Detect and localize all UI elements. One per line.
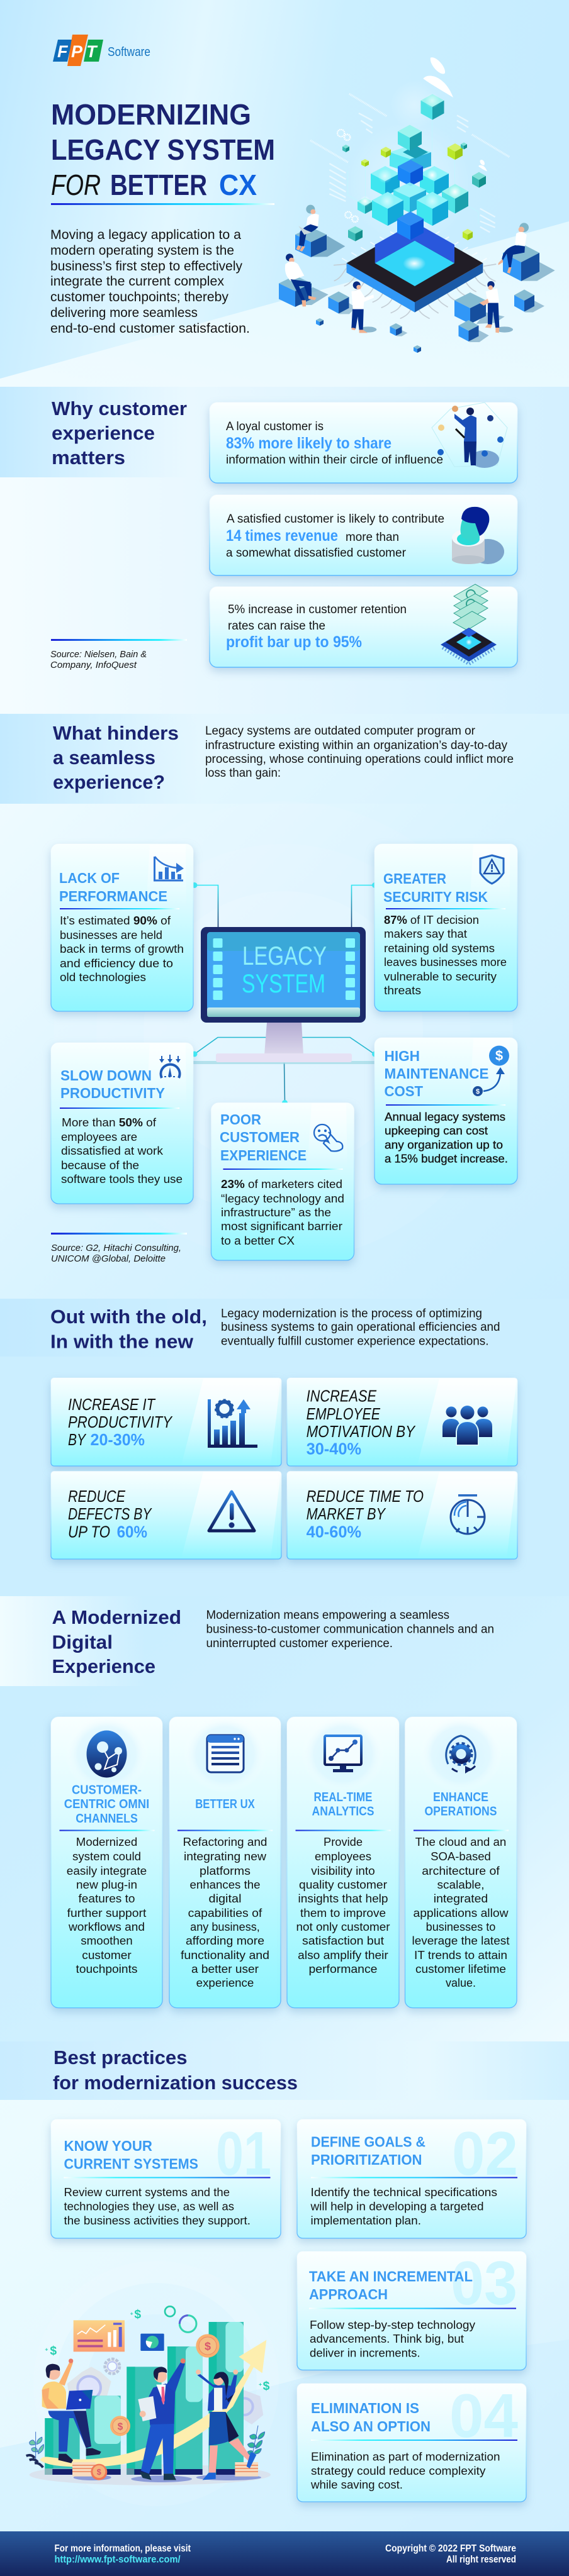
source note xyxy=(50,639,187,670)
heading xyxy=(53,2046,298,2094)
card: enhance operations: integrated xyxy=(434,1892,488,1905)
illustration: team celebrating growth: $ xyxy=(263,2380,270,2393)
card: poor customer experience: to a better CX xyxy=(221,1235,295,1247)
icon: rising bars with gear xyxy=(208,1399,257,1448)
card: real-time analytics: also amplify their xyxy=(298,1949,388,1962)
card: enhance operations xyxy=(405,1715,517,2008)
stat card: reduce defects: 60% xyxy=(117,1523,147,1541)
card: lack of performance: businesses are held xyxy=(60,929,162,941)
title: MODERNIZING xyxy=(51,98,251,131)
card: poor customer experience: 23% of marketers cited xyxy=(221,1178,342,1191)
card: greater security risk: makers say that xyxy=(384,928,467,940)
source note: Source: Nielsen, Bain & xyxy=(50,649,147,660)
illustration: team celebrating growth: $ xyxy=(118,2421,123,2432)
card: enhance operations: customer lifetime xyxy=(415,1963,506,1975)
stat card: reduce defects: UP TO xyxy=(68,1523,110,1541)
section: why customer experience matters xyxy=(0,387,569,714)
heading: In with the new xyxy=(50,1331,194,1352)
heading xyxy=(52,1606,181,1677)
card 03: take an incremental approach: deliver in increments. xyxy=(310,2347,420,2360)
card: high maintenance cost: any organization up to xyxy=(385,1138,503,1151)
logo: FPT Software: P xyxy=(71,42,83,61)
card: satisfied customer xyxy=(210,495,517,575)
stat card: IT productivity: BY xyxy=(68,1430,86,1449)
icon: man with customer network xyxy=(432,402,507,468)
card: lack of performance: and efficiency due to xyxy=(60,957,173,970)
card: loyal customer xyxy=(210,402,517,483)
section: best practices for modernization success xyxy=(0,2041,569,2531)
card: greater security risk: SECURITY RISK xyxy=(383,889,488,905)
icon: browser window xyxy=(207,1735,244,1772)
monitor: legacy system: SYSTEM xyxy=(242,969,325,998)
card: real-time analytics: satisfaction but xyxy=(302,1935,384,1947)
icon: falling chart xyxy=(155,857,184,880)
card 04: elimination is also an option: Elimination as part of modernization xyxy=(311,2451,500,2463)
stat card: reduce defects: REDUCE xyxy=(68,1487,126,1506)
card 02: define goals and prioritization: will help in developing a targeted xyxy=(310,2200,483,2212)
icon: gauge with down arrows xyxy=(159,1055,181,1078)
card: customer-centric omni channels: customer xyxy=(82,1949,132,1962)
card: retention: 5% increase in customer retention xyxy=(228,603,407,616)
intro text: processing, whose continuing operations could inflict more xyxy=(205,753,514,766)
section: what hinders a seamless experience xyxy=(0,714,569,1299)
illustration: team celebrating growth xyxy=(26,2261,279,2506)
card 01: know your current systems: CURRENT SYSTEMS xyxy=(64,2156,198,2172)
card: real-time analytics: performance xyxy=(308,1963,378,1975)
logo: FPT Software: Software xyxy=(108,45,150,59)
card: customer-centric omni channels: CENTRIC OMNI xyxy=(64,1797,149,1811)
card: real-time analytics xyxy=(287,1715,399,2008)
card: slow down productivity xyxy=(51,1043,193,1204)
card: better UX: platforms xyxy=(200,1865,251,1877)
card 04: elimination is also an option: while saving cost. xyxy=(310,2479,403,2491)
footer xyxy=(0,2531,569,2576)
intro text: Legacy modernization is the process of optimizing xyxy=(221,1307,482,1321)
footer: For more information, please visit xyxy=(54,2543,191,2554)
heading: A Modernized xyxy=(52,1606,181,1628)
intro text: infrastructure existing within an organization’s day-to-day xyxy=(205,739,508,752)
card: real-time analytics: insights that help xyxy=(298,1892,388,1905)
card: high maintenance cost: a 15% budget increase. xyxy=(385,1152,508,1165)
card: better UX: digital xyxy=(209,1892,242,1905)
intro paragraph: end-to-end customer satisfaction. xyxy=(50,321,250,336)
title xyxy=(51,98,275,205)
card: customer-centric omni channels: CUSTOMER- xyxy=(72,1784,142,1797)
card: greater security risk: GREATER xyxy=(383,870,446,887)
card: slow down productivity: PRODUCTIVITY xyxy=(60,1085,165,1101)
heading: Digital xyxy=(52,1631,113,1653)
stat card: IT productivity: INCREASE IT xyxy=(68,1395,156,1414)
card 02: define goals and prioritization xyxy=(297,2119,526,2238)
card: loyal customer: information within their circle of influence xyxy=(226,453,443,467)
heading: Why customer xyxy=(52,397,187,419)
card: enhance operations: value. xyxy=(446,1977,476,1989)
card: poor customer experience: most significant barrier xyxy=(221,1220,342,1233)
illustration: team celebrating growth: $ xyxy=(97,2468,101,2477)
card: greater security risk: 87% of IT decision xyxy=(384,914,479,926)
heading: matters xyxy=(52,447,125,469)
intro paragraph: delivering more seamless xyxy=(50,306,198,320)
card: lack of performance: back in terms of growth xyxy=(60,943,184,955)
card: slow down productivity: software tools they use xyxy=(61,1173,183,1185)
card 02: define goals and prioritization: DEFINE GOALS & xyxy=(311,2133,425,2150)
card: real-time analytics: not only customer xyxy=(296,1921,390,1933)
heading: experience xyxy=(52,422,155,444)
title: LEGACY SYSTEM xyxy=(51,133,275,166)
heading: for modernization success xyxy=(53,2072,298,2094)
card: lack of performance: LACK OF xyxy=(59,870,120,886)
intro paragraph: business’s first step to effectively xyxy=(50,259,242,274)
section: out with the old, in with the new xyxy=(0,1299,569,1596)
card: better UX xyxy=(169,1715,281,2008)
source note: Source: G2, Hitachi Consulting, xyxy=(51,1243,181,1253)
intro text: business-to-customer communication channels and an xyxy=(206,1623,494,1636)
card 02: define goals and prioritization: PRIORITIZATION xyxy=(311,2151,422,2168)
card 02: define goals and prioritization: 02 xyxy=(452,2119,518,2188)
intro text: uninterrupted customer experience. xyxy=(206,1637,393,1650)
card: satisfied customer: a somewhat dissatisfied customer xyxy=(226,547,407,560)
card: real-time analytics: employees xyxy=(315,1850,371,1863)
icon: rising dollar cost: $ xyxy=(476,1088,480,1096)
heading: Out with the old, xyxy=(50,1306,207,1328)
card: better UX: BETTER UX xyxy=(195,1797,255,1811)
card: high maintenance cost: MAINTENANCE xyxy=(384,1065,488,1082)
illustration: team celebrating growth: + xyxy=(45,2346,48,2352)
stat card: employee motivation xyxy=(287,1378,517,1466)
stat card: employee motivation: 30-40% xyxy=(307,1440,361,1458)
card: slow down productivity: SLOW DOWN xyxy=(60,1067,152,1084)
card: enhance operations: OPERATIONS xyxy=(424,1805,497,1819)
card: better UX: functionality and xyxy=(181,1949,269,1962)
section: a modernized digital experience xyxy=(0,1596,569,2041)
card 03: take an incremental approach: TAKE AN INCREMENTAL xyxy=(309,2268,473,2285)
title: CX xyxy=(219,169,257,201)
card: better UX: enhances the xyxy=(190,1879,261,1891)
illustration: team celebrating growth: $ xyxy=(50,2345,57,2358)
card 01: know your current systems: technologies they use, as well as xyxy=(64,2200,234,2212)
card: customer-centric omni channels: further support xyxy=(67,1907,146,1919)
card 01: know your current systems: KNOW YOUR xyxy=(64,2138,152,2154)
card: customer-centric omni channels: easily integrate xyxy=(67,1865,147,1877)
intro text: eventually fulfill customer experience expectations. xyxy=(221,1335,488,1348)
card: real-time analytics: quality customer xyxy=(299,1879,387,1891)
illustration: team celebrating growth: $ xyxy=(205,2340,211,2353)
card: real-time analytics: visibility into xyxy=(311,1865,375,1877)
card 01: know your current systems: the business activities they support. xyxy=(64,2214,251,2227)
stat card: IT productivity xyxy=(51,1378,281,1466)
footer: http://www.fpt-software.com/ xyxy=(54,2555,181,2565)
card: customer-centric omni channels: Modernized xyxy=(76,1836,137,1848)
card: greater security risk: leaves businesses more xyxy=(384,956,507,969)
card: better UX: any business, xyxy=(190,1921,260,1933)
card 04: elimination is also an option: ALSO AN OPTION xyxy=(311,2418,431,2434)
title: FOR xyxy=(51,169,101,201)
icon: rising dollar cost: $ xyxy=(495,1048,503,1063)
card: poor customer experience: EXPERIENCE xyxy=(220,1147,307,1163)
card: satisfied customer: A satisfied customer is likely to contribute xyxy=(227,513,444,526)
intro text xyxy=(221,1307,500,1348)
source note: UNICOM @Global, Deloitte xyxy=(51,1253,166,1264)
card: enhance operations: businesses to xyxy=(426,1921,495,1933)
heading: Best practices xyxy=(54,2046,188,2068)
card: better UX: experience xyxy=(196,1977,254,1989)
intro text: loss than gain: xyxy=(205,767,281,780)
card 02: define goals and prioritization: Identify the technical specifications xyxy=(311,2186,497,2199)
title: BETTER xyxy=(110,169,207,201)
stat card: time to market: MARKET BY xyxy=(307,1504,386,1523)
icon: network globe xyxy=(87,1731,127,1777)
card: enhance operations: leverage the latest xyxy=(412,1935,510,1947)
stat card: reduce defects: DEFECTS BY xyxy=(68,1504,152,1523)
card 03: take an incremental approach xyxy=(297,2248,526,2370)
card: better UX: integrating new xyxy=(184,1850,267,1863)
card: satisfied customer: more than xyxy=(346,531,399,544)
stat card: employee motivation: MOTIVATION BY xyxy=(307,1422,415,1441)
source note: Company, InfoQuest xyxy=(50,660,137,670)
illustration: team celebrating growth: $ xyxy=(134,2308,141,2321)
stat card: IT productivity: 20-30% xyxy=(91,1430,145,1449)
logo: FPT Software: F xyxy=(57,42,69,61)
card: customer-centric omni channels: features to xyxy=(78,1892,135,1905)
card: greater security risk: threats xyxy=(384,984,421,997)
card: customer-centric omni channels: workflows and xyxy=(68,1921,145,1933)
card: customer-centric omni channels: system could xyxy=(72,1850,141,1863)
icon: stopwatch xyxy=(451,1494,485,1535)
card 04: elimination is also an option: ELIMINATION IS xyxy=(311,2400,419,2416)
card: high maintenance cost: HIGH xyxy=(384,1048,420,1064)
card 01: know your current systems: 01 xyxy=(216,2119,271,2188)
card: better UX: Refactoring and xyxy=(183,1836,267,1848)
card: poor customer experience: “legacy technology and xyxy=(221,1192,344,1205)
heading: a seamless xyxy=(53,747,155,769)
card: enhance operations: applications allow xyxy=(413,1907,509,1919)
card: slow down productivity: because of the xyxy=(61,1159,139,1172)
intro paragraph xyxy=(50,228,250,336)
card 03: take an incremental approach: 03 xyxy=(451,2248,517,2318)
heading: What hinders xyxy=(53,722,179,744)
card: slow down productivity: More than 50% of xyxy=(62,1116,157,1129)
heading: Experience xyxy=(52,1655,155,1677)
card 02: define goals and prioritization: implementation plan. xyxy=(311,2214,421,2227)
heading xyxy=(53,722,179,793)
card: lack of performance xyxy=(51,844,193,1011)
hero illustration: chip with data cubes and people xyxy=(279,57,555,353)
card: customer-centric omni channels: CHANNELS xyxy=(76,1812,138,1826)
icon: head on pedestal xyxy=(452,507,504,564)
logo: FPT Software xyxy=(53,35,150,66)
heading xyxy=(52,397,187,469)
intro text xyxy=(206,1609,494,1650)
card 04: elimination is also an option xyxy=(297,2381,526,2502)
card: customer-centric omni channels xyxy=(51,1715,162,2008)
icon: analytics monitor xyxy=(325,1736,361,1772)
monitor: legacy system: LEGACY xyxy=(242,941,327,970)
stat card: time to market: REDUCE TIME TO xyxy=(307,1487,424,1506)
card: better UX: a better user xyxy=(191,1963,259,1975)
card: better UX: affording more xyxy=(186,1935,264,1947)
card: enhance operations: The cloud and an xyxy=(415,1836,506,1848)
card: poor customer experience: infrastructure” as the xyxy=(221,1206,331,1219)
card: enhance operations: scalable, xyxy=(437,1879,485,1891)
intro paragraph: customer touchpoints; thereby xyxy=(50,290,228,304)
icon: sad face with pointing hand xyxy=(314,1124,342,1151)
intro paragraph: modern operating system is the xyxy=(50,243,234,258)
intro paragraph: Moving a legacy application to a xyxy=(50,228,241,242)
card: enhance operations: SOA-based xyxy=(431,1850,491,1863)
heading xyxy=(50,1306,207,1352)
card: high maintenance cost xyxy=(375,1038,517,1184)
monitor: legacy system xyxy=(193,927,375,1064)
card: retention xyxy=(210,584,517,667)
intro text: business systems to gain operational efficiencies and xyxy=(221,1321,500,1334)
card: real-time analytics: REAL-TIME xyxy=(313,1790,373,1804)
footer: All right reserved xyxy=(446,2555,516,2565)
card: real-time analytics: them to improve xyxy=(300,1907,386,1919)
card: lack of performance: PERFORMANCE xyxy=(59,888,167,904)
card: customer-centric omni channels: new plug-in xyxy=(76,1879,137,1891)
card: satisfied customer: 14 times revenue xyxy=(226,527,338,545)
card 04: elimination is also an option: 04 xyxy=(449,2381,518,2450)
card: greater security risk: vulnerable to security xyxy=(384,970,497,983)
card: lack of performance: It’s estimated 90% of xyxy=(60,914,171,927)
card: real-time analytics: ANALYTICS xyxy=(312,1805,374,1819)
stat card: time to market: 40-60% xyxy=(307,1523,361,1541)
stat card: employee motivation: EMPLOYEE xyxy=(307,1404,381,1423)
icon: warning shield xyxy=(480,855,504,884)
card: greater security risk xyxy=(375,844,517,1011)
card 04: elimination is also an option: strategy could reduce complexity xyxy=(311,2465,485,2477)
card 01: know your current systems: Review current systems and the xyxy=(64,2186,230,2199)
card: customer-centric omni channels: smoothen xyxy=(81,1935,133,1947)
card 03: take an incremental approach: advancements. Think big, but xyxy=(310,2333,464,2345)
card: high maintenance cost: Annual legacy systems xyxy=(385,1111,505,1123)
card: poor customer experience: CUSTOMER xyxy=(220,1129,300,1145)
card: high maintenance cost: COST xyxy=(384,1083,423,1099)
card: retention: rates can raise the xyxy=(228,619,325,633)
card: better UX: capabilities of xyxy=(188,1907,262,1919)
icon: rising dollar cost xyxy=(473,1046,509,1096)
card: greater security risk: retaining old systems xyxy=(384,942,495,955)
stat card: time to market xyxy=(287,1472,517,1559)
icon: money stack on chip xyxy=(441,584,497,664)
stat card: employee motivation: INCREASE xyxy=(307,1386,377,1405)
card 01: know your current systems xyxy=(51,2119,281,2238)
card: enhance operations: IT trends to attain xyxy=(414,1949,507,1962)
card: customer-centric omni channels: touchpoints xyxy=(76,1963,137,1975)
intro text xyxy=(205,724,514,780)
icon: gear with circular arrows xyxy=(446,1736,475,1774)
card: high maintenance cost: upkeeping can cost xyxy=(385,1124,488,1137)
stat card: reduce defects xyxy=(51,1472,281,1559)
card: loyal customer: A loyal customer is xyxy=(226,420,324,433)
footer: Copyright © 2022 FPT Software xyxy=(385,2543,516,2554)
card 03: take an incremental approach: APPROACH xyxy=(309,2286,388,2302)
intro text: Modernization means empowering a seamless xyxy=(206,1609,449,1622)
icon: group of people xyxy=(442,1406,492,1445)
card: slow down productivity: employees are xyxy=(61,1131,137,1143)
card: enhance operations: architecture of xyxy=(422,1865,500,1877)
logo: FPT Software: T xyxy=(86,42,98,61)
card: retention: profit bar up to 95% xyxy=(226,633,362,651)
illustration: team celebrating growth: + xyxy=(130,2311,133,2317)
card: loyal customer: 83% more likely to share xyxy=(226,435,392,452)
icon: warning triangle xyxy=(209,1492,254,1531)
illustration: team celebrating growth: + xyxy=(259,2381,262,2387)
intro paragraph: integrate the current complex xyxy=(50,274,224,289)
card: real-time analytics: Provide xyxy=(324,1836,363,1848)
card: enhance operations: ENHANCE xyxy=(433,1790,488,1804)
stat card: IT productivity: PRODUCTIVITY xyxy=(68,1413,172,1431)
intro text: Legacy systems are outdated computer program or xyxy=(205,724,476,738)
card: slow down productivity: dissatisfied at work xyxy=(61,1145,164,1157)
source note xyxy=(51,1233,187,1264)
card: poor customer experience: POOR xyxy=(220,1111,261,1128)
card 03: take an incremental approach: Follow step-by-step technology xyxy=(310,2319,475,2331)
heading: experience? xyxy=(53,771,165,793)
card: lack of performance: old technologies xyxy=(60,971,146,984)
connector lines xyxy=(191,882,378,1106)
card: poor customer experience xyxy=(211,1103,354,1260)
hero background xyxy=(0,0,569,387)
